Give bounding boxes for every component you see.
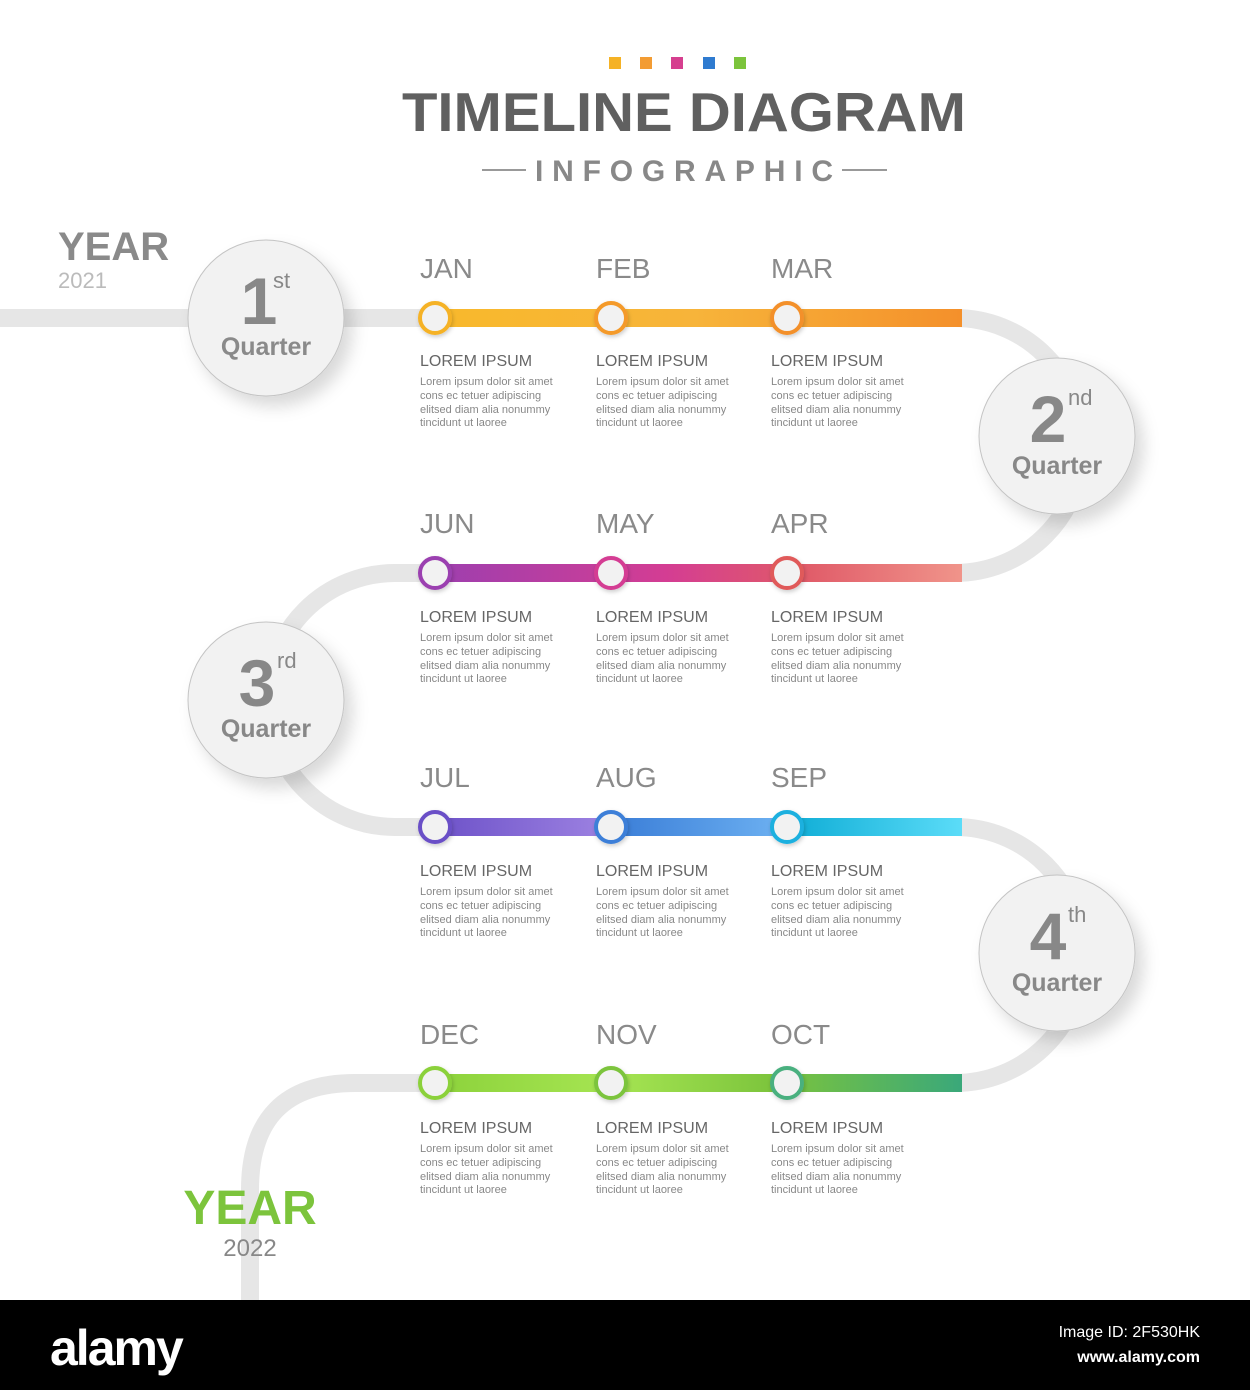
text blocks: Lorem ipsum dolor sit amet (420, 376, 553, 388)
quarter circles: st (273, 268, 290, 293)
subtitle: INFOGRAPHIC (535, 155, 833, 188)
year 2021 (58, 225, 169, 293)
month labels (420, 253, 833, 1050)
text blocks: elitsed diam alia nonummy (420, 404, 551, 416)
quarter circles: nd (1068, 385, 1092, 410)
quarter circles: 4 (1030, 899, 1067, 973)
quarter circles: Quarter (1012, 969, 1102, 997)
colored bars (425, 309, 962, 1092)
year 2022: YEAR (183, 1182, 317, 1235)
quarter circles: rd (277, 648, 297, 673)
month labels: MAR (771, 253, 833, 284)
year 2022: 2022 (223, 1235, 277, 1262)
text blocks: cons ec tetuer adipiscing (420, 390, 541, 402)
year 2021: 2021 (58, 268, 107, 293)
month labels: APR (771, 508, 829, 539)
year 2022 (183, 1182, 317, 1262)
month labels: AUG (596, 762, 657, 793)
header color squares (609, 57, 746, 69)
month labels: OCT (771, 1019, 830, 1050)
text blocks (420, 353, 904, 1196)
footer band: www.alamy.com (1076, 1349, 1200, 1366)
month labels: MAY (596, 508, 655, 539)
month labels: JAN (420, 253, 473, 284)
month labels: FEB (596, 253, 650, 284)
month labels: DEC (420, 1019, 479, 1050)
year 2021: YEAR (58, 225, 169, 269)
quarter circles: 3 (239, 646, 275, 720)
nodes (420, 303, 802, 1098)
month labels: SEP (771, 762, 827, 793)
quarter circles: Quarter (221, 715, 311, 743)
quarter circles: 1 (241, 264, 277, 338)
quarter circles: th (1068, 902, 1086, 927)
quarter circles (188, 240, 1135, 1031)
gray track (0, 318, 1083, 1300)
month labels: NOV (596, 1019, 657, 1050)
footer band: alamy (50, 1320, 184, 1376)
footer band (0, 1300, 1250, 1390)
footer band: Image ID: 2F530HK (1059, 1324, 1200, 1341)
text blocks: LOREM IPSUM (420, 353, 532, 370)
month labels: JUL (420, 762, 470, 793)
quarter circles: Quarter (1012, 452, 1102, 480)
quarter circles: Quarter (221, 333, 311, 361)
quarter circles: 2 (1030, 382, 1066, 456)
title: TIMELINE DIAGRAM (402, 81, 966, 143)
text blocks: tincidunt ut laoree (420, 417, 507, 429)
month labels: JUN (420, 508, 474, 539)
